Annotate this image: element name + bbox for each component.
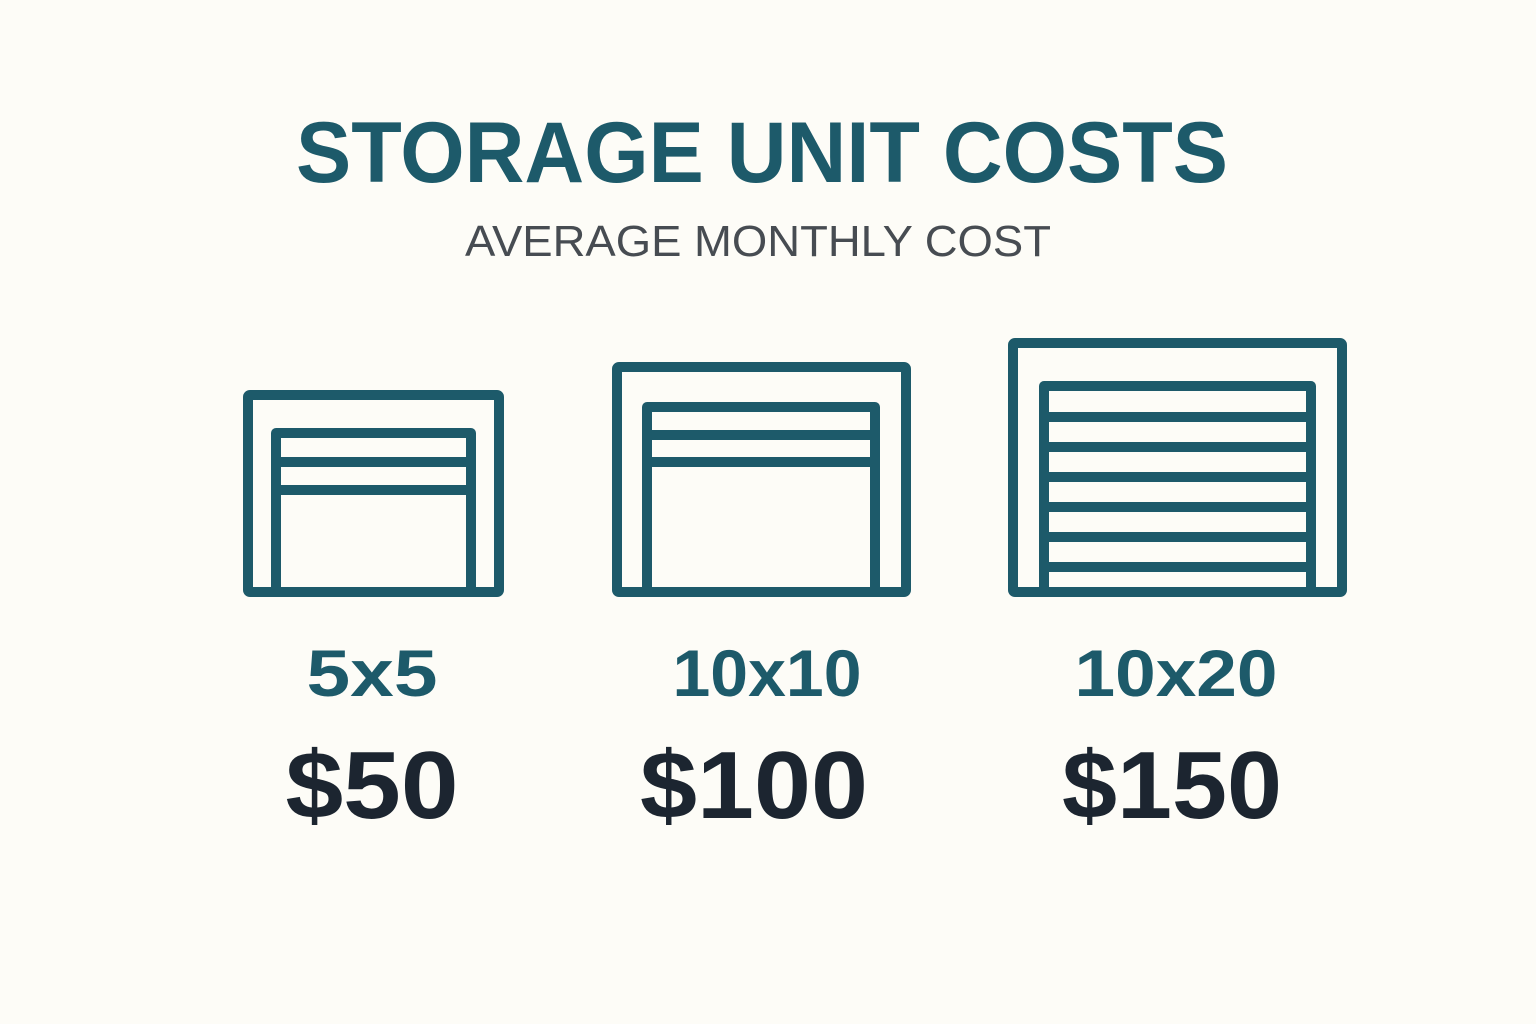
price: $100: $100 [640,732,868,839]
title: STORAGE UNIT COSTS [296,105,1228,201]
icon: 10x10 storage unit [617,367,906,592]
label: 5x5: 5x5 [306,636,438,710]
subtitle: AVERAGE MONTHLY COST [465,217,1051,266]
label: 10x20: 10x20 [1074,636,1278,710]
label: 10x10: 10x10 [672,636,862,710]
icon: 5x5 storage unit [248,395,499,592]
price: $150: $150 [1062,732,1282,839]
price: $50: $50 [286,732,458,839]
icon: 10x20 storage unit [1013,343,1342,592]
